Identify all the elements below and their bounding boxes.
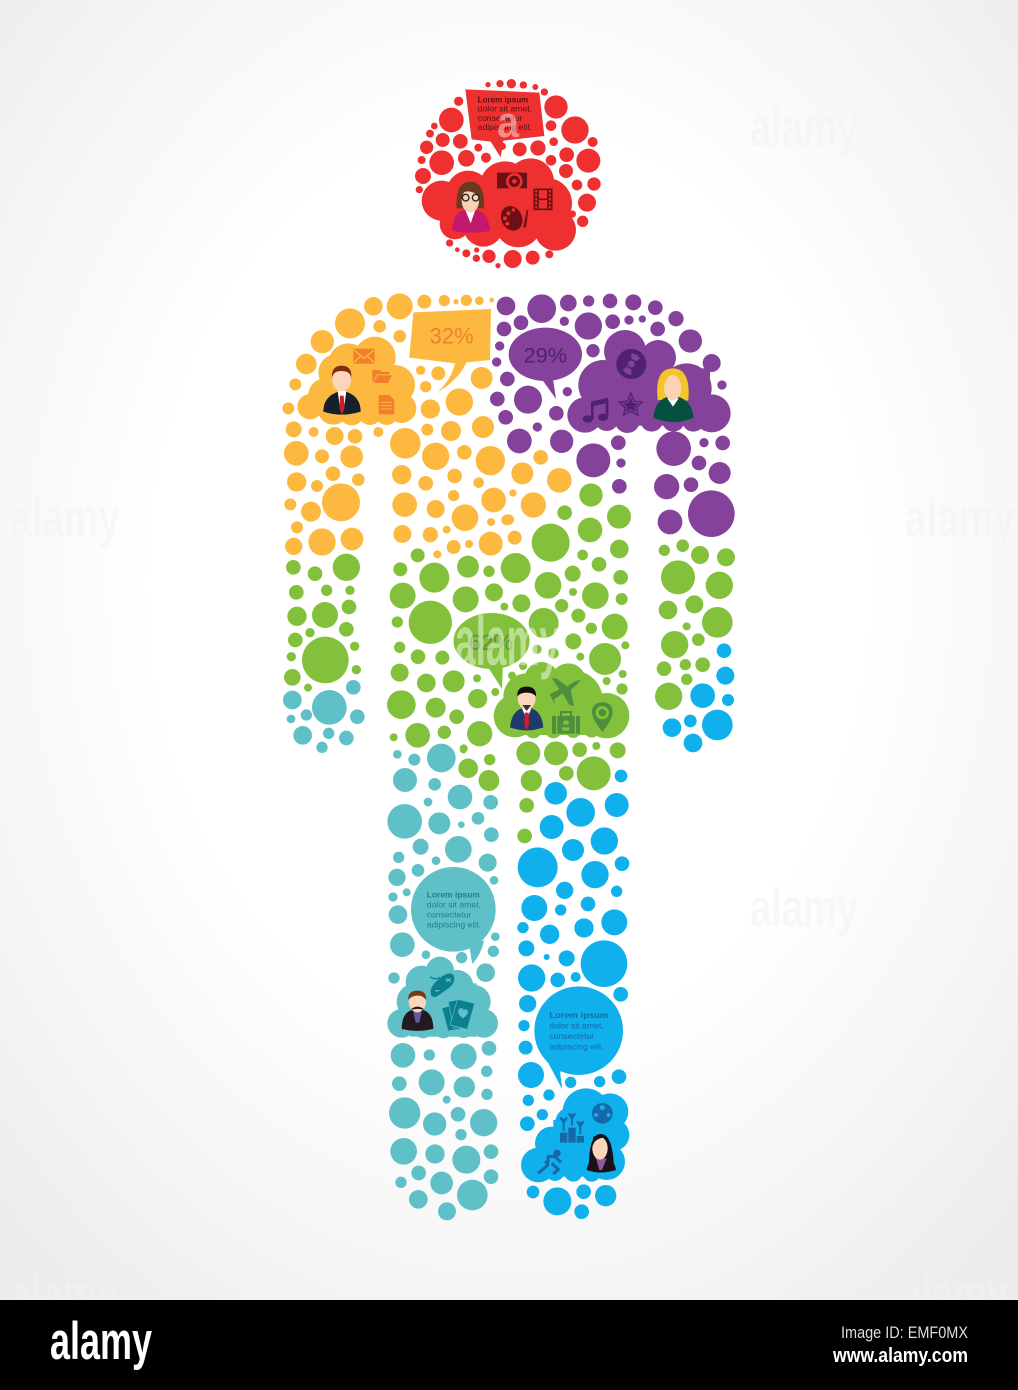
- blue upper leg dots: [517, 782, 629, 1002]
- footer logo: alamy: [50, 1312, 152, 1371]
- icon: businessman: [323, 366, 361, 415]
- purple cloud: [567, 330, 731, 433]
- icon: dark haired woman: [587, 1134, 616, 1172]
- panel: right leg (blue): [517, 643, 734, 1219]
- icon: woman with glasses: [452, 182, 490, 233]
- yellow speech bubble: 32%: [409, 309, 491, 392]
- footer bar: [0, 1300, 1018, 1390]
- watermark text over head and torso: alamy: [455, 602, 560, 680]
- teal speech bubble: consectetur: [427, 910, 472, 920]
- teal speech bubble: Lorem ipsum: [427, 889, 480, 899]
- red speech bubble: [465, 89, 544, 157]
- red speech bubble: adipiscing elit.: [478, 122, 532, 132]
- image id: Image ID: EMF0MX: [841, 1323, 968, 1342]
- green cloud: [494, 662, 629, 738]
- watermark text on background: alamy: [750, 98, 858, 158]
- blue speech bubble: consectetur: [549, 1031, 594, 1041]
- watermark text over head and torso: a: [497, 98, 519, 147]
- icon: map pin: [592, 702, 613, 732]
- purple speech bubble: 29%: [509, 328, 582, 399]
- icon: music notes: [583, 398, 608, 423]
- red speech bubble: consectetur: [478, 113, 523, 123]
- blue speech bubble: [534, 986, 623, 1089]
- teal lower leg dots: [389, 1041, 498, 1220]
- teal upper leg dots: [387, 744, 500, 984]
- red speech bubble: Lorem ipsum: [478, 95, 529, 105]
- teal cloud: [387, 957, 498, 1038]
- blue lower leg dots: [518, 995, 626, 1219]
- yellow dots: [282, 293, 572, 558]
- icon: runner: [538, 1150, 561, 1174]
- panel: head (red): [415, 79, 601, 268]
- teal speech bubble: adipiscing elit.: [427, 919, 481, 929]
- icon: football: [592, 1103, 613, 1124]
- icon: blonde woman: [653, 368, 694, 422]
- yellow speech bubble: 32%: 32%: [430, 324, 474, 349]
- yellow cloud: [297, 337, 416, 425]
- website: www.alamy.com: [832, 1345, 968, 1367]
- right torso and arm dots: [501, 518, 735, 791]
- left arm and torso dots: [284, 548, 508, 790]
- blue speech bubble: adipiscing elit.: [549, 1042, 604, 1052]
- icon: bearded man: [510, 687, 543, 730]
- icon: game controller: [430, 973, 454, 997]
- teal hand dots: [283, 680, 365, 753]
- blue cloud: [521, 1088, 629, 1182]
- icon: playing cards: [442, 999, 475, 1031]
- icon: folder: [372, 370, 392, 383]
- red cloud: [422, 158, 576, 251]
- watermark text on background: alamy: [10, 1264, 118, 1324]
- icon: man with moustache: [402, 991, 433, 1031]
- purple speech bubble: 29%: 29%: [524, 342, 567, 367]
- icon: palette: [497, 202, 528, 234]
- teal speech bubble: dolor sit amet,: [427, 899, 481, 909]
- icon: suitcase: [552, 712, 580, 734]
- panel: shoulder and torso (yellow): [282, 293, 572, 558]
- green speech bubble: 62%: 62%: [469, 630, 513, 655]
- red speech bubble: dolor sit amet,: [478, 104, 532, 114]
- icon: camera: [497, 173, 527, 190]
- watermark text on background: alamy: [750, 878, 858, 938]
- blue speech bubble: dolor sit amet,: [549, 1020, 604, 1030]
- more green dots at upper right torso: [557, 483, 631, 529]
- panel: shoulder and arm (purple): [490, 294, 735, 537]
- blue hand dots: [615, 643, 734, 782]
- teal speech bubble: [411, 867, 496, 964]
- panel: left leg (teal): [283, 680, 500, 1220]
- green speech bubble: 62%: [454, 613, 530, 689]
- watermark text over head and torso: [455, 98, 560, 680]
- icon: star: [618, 391, 644, 416]
- blue speech bubble: Lorem ipsum: [549, 1010, 609, 1020]
- icon: airplane: [549, 678, 581, 706]
- icon: document: [379, 395, 394, 414]
- icon: vinyl disc: [616, 349, 646, 379]
- watermark text on background: alamy: [10, 488, 120, 548]
- icon: film strip: [534, 189, 552, 209]
- red dots: [415, 79, 601, 268]
- panel: torso (green): [284, 483, 735, 791]
- purple dots: [490, 294, 735, 537]
- icon: podium: [560, 1113, 584, 1143]
- icon: envelope: [353, 349, 375, 364]
